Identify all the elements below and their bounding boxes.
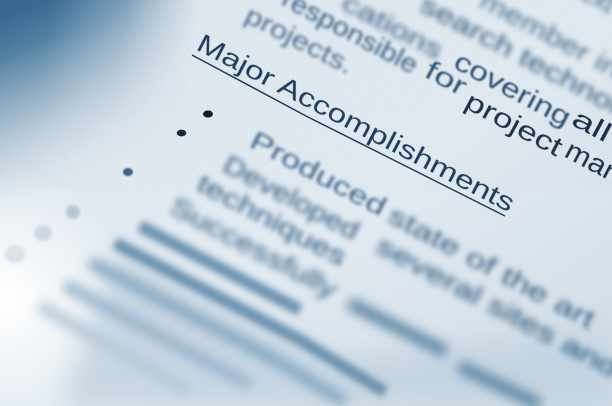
heading: Major Accomplishments: Major Accomplishments — [192, 28, 520, 218]
list item: Developed several sites: several sites and — [371, 230, 612, 383]
soft blue wash behind blurred list — [60, 250, 612, 406]
text line: responsible for project man — [277, 0, 612, 189]
blurred band 9 — [40, 306, 190, 392]
blurred band 6 — [115, 243, 385, 392]
text line: cations covering all: covering — [449, 46, 576, 132]
blurred list text — [40, 125, 612, 405]
list item: Produced state of the art — [245, 125, 601, 335]
list item: Successfully: Successfully — [165, 191, 343, 304]
text line: responsible for project man: for — [420, 55, 472, 101]
text line: cations covering all — [337, 0, 612, 148]
bullet 6 — [5, 245, 25, 263]
list item: Developed several sites: Developed — [218, 149, 365, 246]
blurred band 8 — [65, 285, 250, 385]
paper grain texture — [0, 0, 612, 190]
bullet 1 — [203, 110, 213, 118]
blurred band 4b — [349, 303, 540, 405]
bullet points — [5, 110, 213, 263]
blurred band 7 — [90, 262, 345, 402]
list item: Produced state of the art: Produced — [245, 125, 392, 222]
list item: Developed several sites — [218, 149, 612, 383]
text line: responsible for project man: project — [460, 86, 568, 162]
bullet 4 — [66, 205, 80, 219]
dark blue shadow, top left — [0, 0, 192, 188]
upper paragraph text — [240, 0, 612, 189]
blurred band 5 — [140, 226, 300, 310]
bright highlight, lower left — [0, 160, 150, 406]
bullet 2 — [177, 130, 186, 136]
text line: projects.: projects. — [240, 0, 359, 80]
bullet 5 — [34, 225, 52, 241]
list item: techniques: techniques — [192, 168, 352, 272]
bullet 3 — [123, 168, 133, 176]
list item: Produced state of the art: state of the art — [383, 200, 601, 335]
text line: cations covering all: all — [567, 103, 612, 148]
heading: Major Accomplishments — [192, 28, 520, 218]
